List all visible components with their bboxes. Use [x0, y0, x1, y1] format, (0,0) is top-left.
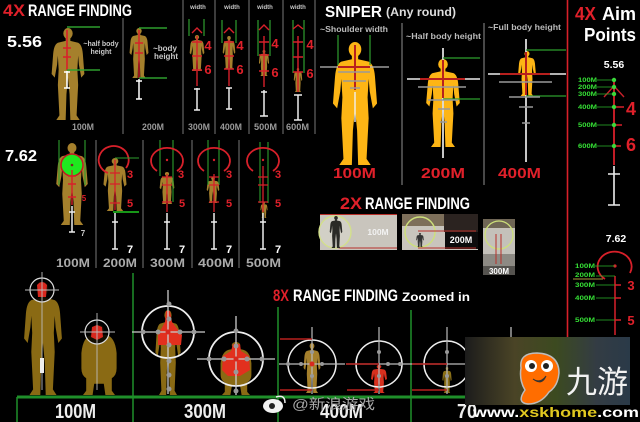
200M sniper figure: [406, 31, 481, 182]
label: 5.56: 5.56: [7, 34, 42, 51]
300M crouching target: [197, 316, 275, 395]
aim chart 5.56: 200M: [578, 85, 597, 91]
aim chart 5.56: 600M: [578, 144, 597, 150]
2X 300M photo: 300M: [489, 267, 509, 276]
column dividers: [96, 140, 239, 268]
500M column: [254, 5, 279, 132]
2X 100M photo: [319, 214, 397, 250]
heading: 8X range finding zoomed in: [273, 287, 470, 305]
aim chart 5.56: 500M: [578, 123, 597, 129]
panel: 2X range finding: [319, 195, 515, 276]
column dividers: [123, 0, 315, 134]
200M figure: [99, 146, 139, 270]
heading: 8X range finding zoomed in: Zoomed in: [402, 290, 470, 304]
watermark: weibo: @新浪游戏: [292, 396, 375, 412]
400M column: 6: [236, 62, 244, 77]
icon: weibo: [263, 396, 285, 413]
heading: 4X aim points: Aim: [602, 4, 636, 24]
heading: 2X range finding: RANGE FINDING: [365, 195, 470, 213]
watermark: jiuyou logo box: [465, 337, 630, 405]
panel: 4X range finding 7.62: [5, 140, 281, 270]
400M figure: [198, 140, 234, 270]
panel: 4X aim points: [568, 0, 636, 340]
300M figure: 3: [178, 169, 184, 181]
500M figure: 3: [275, 169, 281, 181]
heading: 4X aim points: Points: [584, 25, 636, 45]
200M sniper figure: ~Half body height: [406, 31, 481, 41]
500M column: width: [256, 5, 273, 11]
2X 300M photo: [483, 219, 515, 276]
100M figure: 7: [81, 229, 86, 238]
heading: 2X range finding: [340, 195, 470, 213]
400M column: 400M: [220, 122, 242, 132]
200M figure: 7: [127, 244, 133, 256]
200M figure with reticle: 200M: [142, 122, 164, 132]
200M figure: 5: [127, 198, 133, 210]
aim chart 7.62: 3: [627, 278, 635, 293]
100M figure: 100M: [56, 256, 90, 270]
panel: 4X range finding 5.56: [3, 0, 315, 134]
site url: www. xskhome .com: [472, 404, 639, 420]
300M column: width: [189, 5, 206, 11]
green table lines: [17, 273, 480, 422]
aim chart 7.62: 5: [627, 313, 635, 328]
100M standing target: [24, 272, 62, 395]
400M sniper figure: [488, 22, 566, 182]
300M figure: [150, 140, 185, 270]
aim chart 5.56: 4: [626, 99, 636, 119]
500M column: 6: [271, 65, 279, 80]
400M figure: 400M: [198, 256, 234, 270]
300M figure: 5: [179, 198, 185, 210]
aim chart 7.62: 100M: [575, 263, 595, 270]
200M figure: 3: [127, 169, 133, 181]
200M sniper figure: 200M: [421, 165, 465, 182]
100M figure with reticle: [52, 27, 119, 132]
500M figure: [246, 142, 281, 270]
400M scope one: [279, 327, 345, 394]
heading: 4X aim points: 4X: [575, 4, 596, 24]
heading: sniper any round: (Any round): [386, 7, 456, 19]
100M figure: 5: [82, 194, 87, 203]
600M column: 600M: [286, 122, 309, 132]
100M sniper figure: ~Shoulder width: [320, 24, 388, 34]
icon: orange mascot: [520, 353, 559, 404]
400M scope three: [412, 327, 470, 394]
400M sniper figure: 400M: [498, 165, 541, 182]
heading: 4X range finding: RANGE FINDING: [28, 1, 132, 20]
100M figure: [56, 140, 90, 270]
2X 200M photo: [402, 214, 478, 250]
300M figure: 7: [179, 244, 185, 256]
200M figure with reticle: ~body: [153, 44, 177, 53]
300M figure: 300M: [150, 256, 185, 270]
300M column: 4: [204, 38, 212, 53]
400M column: [220, 5, 244, 132]
500M figure: 7: [275, 244, 281, 256]
aim chart 5.56: 6: [626, 135, 636, 155]
300M column: 300M: [188, 122, 210, 132]
panel: sniper: [320, 4, 566, 185]
200M figure with reticle: height: [154, 52, 178, 61]
heading: 4X range finding: 4X: [3, 1, 26, 20]
aim chart 7.62: 400M: [575, 295, 595, 302]
600M column: 6: [306, 66, 314, 81]
100M sniper figure: 100M: [333, 165, 376, 182]
400M sniper figure: ~Full body height: [488, 22, 561, 32]
dividers: [402, 23, 484, 185]
400M figure: 3: [226, 169, 232, 181]
label: 7.62: 7.62: [5, 148, 37, 165]
400M figure: 5: [226, 198, 232, 210]
aim chart 5.56: [578, 59, 636, 205]
heading: 2X range finding: 2X: [340, 195, 362, 213]
heading: sniper any round: [325, 4, 456, 21]
400M column: width: [223, 5, 240, 11]
heading: sniper any round: SNIPER: [325, 4, 382, 21]
200M figure: 200M: [103, 256, 137, 270]
400M column: 4: [236, 38, 244, 53]
300M standing target: [132, 290, 205, 395]
100M figure with reticle: 100M: [72, 122, 94, 132]
aim chart 5.56: 300M: [578, 92, 597, 98]
2X 100M photo: 100M: [367, 227, 389, 237]
heading: 4X aim points: [575, 4, 636, 45]
aim chart 7.62: [573, 233, 635, 335]
100M figure with reticle: height: [90, 49, 112, 56]
panel: 8X range finding: [17, 272, 511, 422]
aim chart 7.62: 200M: [575, 272, 595, 279]
300M column: 6: [204, 62, 212, 77]
600M column: 4: [306, 37, 314, 52]
watermark: weibo: [263, 396, 375, 413]
2X 200M photo: 200M: [450, 235, 472, 245]
100M crouching target: [80, 313, 117, 395]
aim chart 5.56: 400M: [578, 105, 597, 111]
500M figure: 5: [275, 198, 281, 210]
heading: 8X range finding zoomed in: 8X: [273, 287, 289, 305]
600M column: [286, 5, 314, 132]
300M column: [188, 5, 212, 132]
logo text: 九游: [566, 365, 628, 400]
400M figure: 7: [226, 244, 232, 256]
600M column: width: [289, 5, 306, 11]
200M figure with reticle: [130, 28, 178, 132]
400M scope two: [346, 327, 412, 394]
100M figure with reticle: ~half body: [83, 41, 119, 48]
aim chart 7.62: 300M: [575, 282, 595, 289]
500M column: 4: [271, 36, 279, 51]
aim chart 5.56: 5.56: [604, 59, 624, 71]
range labels: [55, 401, 477, 422]
500M figure: 500M: [246, 256, 281, 270]
heading: 8X range finding zoomed in: RANGE FINDING: [293, 287, 398, 305]
heading: 4X range finding: [3, 1, 132, 20]
aim chart 5.56: 100M: [578, 78, 597, 84]
100M sniper figure: [320, 24, 389, 182]
aim chart 7.62: 500M: [575, 317, 595, 324]
500M column: 500M: [254, 122, 277, 132]
partial scope: [510, 327, 512, 340]
aim chart 7.62: 7.62: [606, 233, 626, 245]
